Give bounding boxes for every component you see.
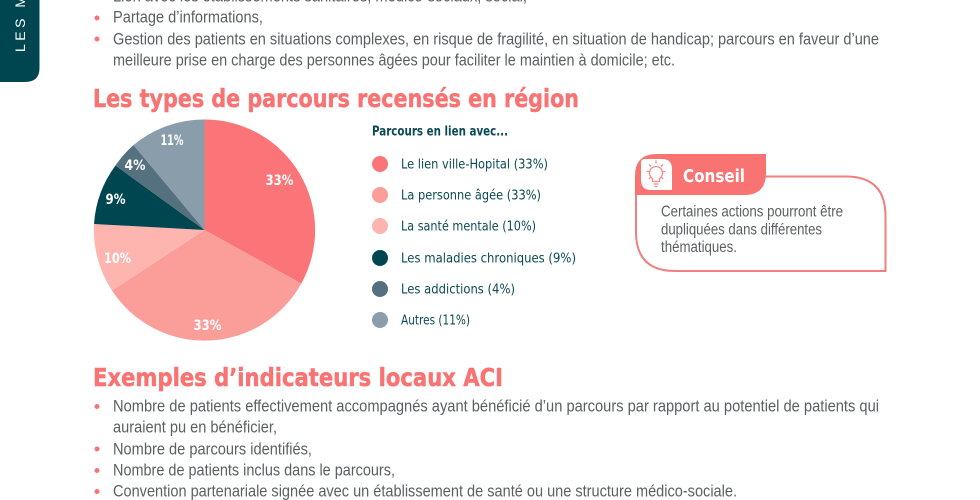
legend: Les maladies chroniques (9%) <box>401 250 576 266</box>
bullet list: indicateurs: Convention partenariale signée avec un établissement de santé ou une structure médico-sociale. <box>113 482 737 500</box>
callout: conseil: dupliquées dans différentes <box>661 222 822 238</box>
bullet list: top: meilleure prise en charge des personnes âgées pour faciliter le maintien à domicile; etc. <box>113 50 675 70</box>
legend: Le lien ville-Hopital (33%) <box>401 156 548 172</box>
pie chart: 33% <box>266 173 294 189</box>
bullet list: top <box>94 0 879 70</box>
pie chart: 4% <box>124 158 146 174</box>
pie chart: 9% <box>106 192 126 208</box>
callout: conseil: Certaines actions pourront être <box>661 204 843 220</box>
pie chart: 10% <box>104 251 131 267</box>
callout: conseil: thématiques. <box>661 239 737 256</box>
legend: La personne âgée (33%) <box>401 188 541 204</box>
heading: indicateurs: Exemples d’indicateurs locaux ACI <box>93 363 503 392</box>
bullet list: top: Partage d’informations, <box>113 8 263 26</box>
bullet list: indicateurs <box>94 396 879 500</box>
bullet list: indicateurs: Nombre de patients effectivement accompagnés ayant bénéficié d’un parcours par rapport au potentiel de patients qui <box>113 396 879 416</box>
legend: Autres (11%) <box>401 312 470 328</box>
icon: light bulb <box>641 159 672 190</box>
bullet list: indicateurs: Nombre de patients inclus dans le parcours, <box>113 460 395 480</box>
pie chart: 11% <box>160 133 184 149</box>
pie chart: 33% <box>194 318 222 334</box>
legend: La santé mentale (10%) <box>401 218 536 234</box>
legend <box>372 124 576 328</box>
bullet list: indicateurs: auraient pu en bénéficier, <box>113 418 277 436</box>
bullet list: indicateurs: Nombre de parcours identifiés, <box>113 440 312 458</box>
callout: conseil: Conseil <box>683 167 745 187</box>
legend: Parcours en lien avec... <box>372 124 508 140</box>
callout: conseil <box>635 154 886 271</box>
legend: Les addictions (4%) <box>401 282 515 298</box>
sidebar tab <box>0 0 40 82</box>
heading: types de parcours: Les types de parcours recensés en région <box>93 84 579 113</box>
pie chart <box>94 119 315 341</box>
